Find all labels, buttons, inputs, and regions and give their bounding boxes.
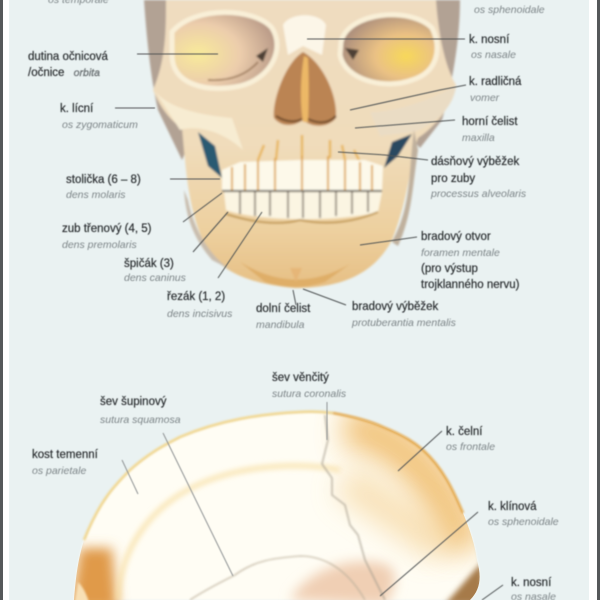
coronal suture (322, 415, 385, 600)
right cheek (370, 86, 456, 136)
cranial dome (74, 412, 480, 600)
cranium side shadow (144, 0, 460, 160)
temporal shading (290, 561, 395, 600)
leader lines (115, 39, 503, 600)
orbit inner shadows (208, 62, 258, 80)
label: foramen note: (pro výstup (421, 263, 478, 275)
inner parietal rim (118, 466, 340, 600)
left orbit (172, 12, 277, 88)
label: frontal latin: os frontale (446, 441, 495, 453)
right page border (589, 0, 600, 600)
label: coronal latin: sutura coronalis (272, 388, 347, 400)
left page border (0, 0, 9, 600)
label: zygomatic latin: os zygomaticum (62, 119, 138, 131)
label: premolar latin: dens premolaris (62, 239, 137, 251)
label: squamous latin: sutura squamosa (100, 414, 181, 426)
label: zygomatic bone: k. lícní (60, 103, 94, 115)
front skull illustration (144, 0, 460, 288)
left cheek highlight (153, 88, 243, 150)
cavity behind upper jaw, right (384, 134, 412, 168)
frontal pale wash (345, 480, 440, 545)
teeth (222, 156, 383, 223)
label: squamous suture: šev šupinový (100, 396, 167, 408)
nasal bridge (283, 15, 326, 55)
label: alveolar process: dásňový výběžek (431, 156, 519, 168)
label: orbit line 2: /očnice orbita (28, 67, 100, 79)
label: nasal latin: os nasale (471, 49, 516, 61)
label: nasal bone: k. nosní (511, 577, 552, 589)
label: sphenoid latin: os sphenoidale (474, 4, 545, 16)
frontal bone shading (345, 425, 462, 550)
label: vomer latin: vomer (470, 92, 500, 104)
jaw shading right (392, 130, 418, 246)
label: parietal latin: os parietale (32, 465, 86, 477)
label: premolar: zub třenový (4, 5) (62, 223, 152, 235)
label: sphenoid latin: os sphenoidale (488, 516, 559, 528)
label: parietal bone: kost temenní (32, 449, 99, 461)
skull face (153, 0, 456, 288)
label: vomer: k. radličná (469, 76, 522, 88)
label: incisor: řezák (1, 2) (167, 291, 225, 303)
labels: front skull, left (28, 0, 311, 331)
jaw ramus shading left (184, 190, 235, 272)
squamous suture (190, 556, 365, 600)
label: molar latin: dens molaris (66, 189, 126, 201)
occipital highlight (74, 582, 90, 600)
label: foramen note line 2: trojklanného nervu) (421, 279, 520, 291)
labels: side skull (32, 372, 559, 600)
label: orbit: dutina očnicová (28, 51, 109, 63)
label: canine latin: dens caninus (124, 272, 187, 284)
label: mandible latin: mandibula (256, 319, 305, 331)
chin shading (240, 262, 350, 287)
label: mental protuberance: bradový výběžek (352, 301, 439, 313)
cavity behind upper jaw, left (198, 132, 222, 178)
occipital shading (70, 548, 118, 600)
label: alveolar latin: processus alveolaris (430, 188, 527, 200)
label: nasal bone: k. nosní (469, 34, 510, 46)
label: foramen latin: foramen mentale (421, 247, 500, 259)
labels: front skull, right (351, 4, 545, 329)
label: incisor latin: dens incisivus (167, 308, 233, 320)
label: mental foramen: bradový otvor (421, 231, 491, 243)
label: molar: stolička (6 – 8) (66, 174, 141, 186)
label: canine: špičák (3) (124, 258, 174, 270)
label: maxilla: horní čelist (462, 116, 518, 128)
label: coronal suture: šev věnčitý (272, 372, 329, 384)
label: sphenoid bone: k. klínová (488, 501, 537, 513)
label: frontal bone: k. čelní (446, 426, 483, 438)
upper tooth roots (258, 135, 360, 162)
label: alveolar line 2: pro zuby (431, 173, 475, 185)
dome rim (84, 412, 333, 540)
label: mandible: dolní čelist (256, 303, 311, 315)
side skull illustration (70, 412, 484, 600)
right orbit (340, 15, 437, 84)
label: maxilla latin: maxilla (462, 132, 495, 144)
nose shadow (445, 562, 484, 600)
nasal cavity (274, 52, 336, 126)
label: protuberance latin: protuberantia mentalis (351, 317, 457, 329)
